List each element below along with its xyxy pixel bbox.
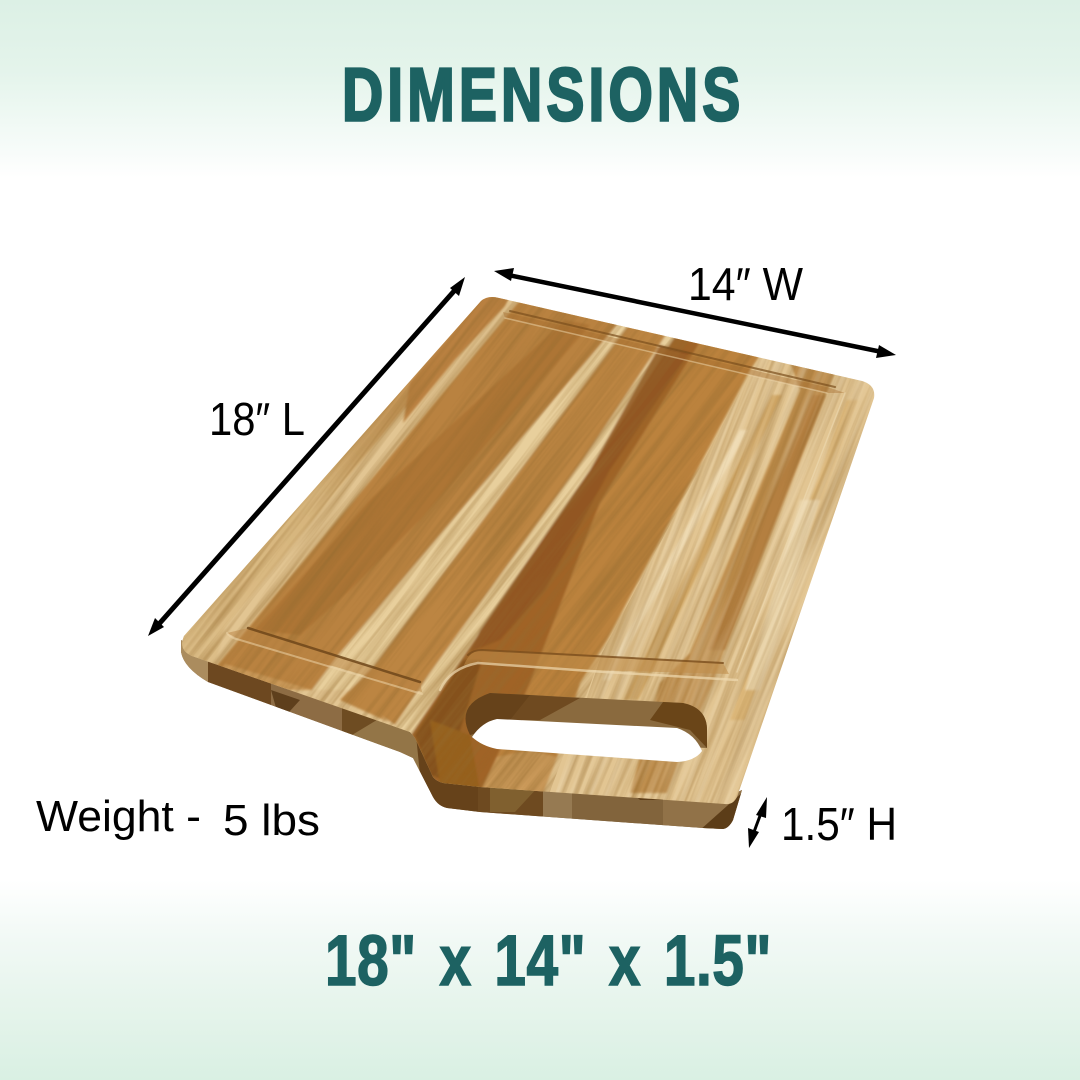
- stripe: narrow light 1: [312, 325, 628, 691]
- stripe: left medium: [197, 300, 638, 690]
- background: top mint band: [0, 0, 1080, 178]
- handle cutout: [466, 693, 707, 762]
- juice groove: [227, 311, 845, 694]
- grain overlay: right: [556, 358, 872, 804]
- groove channel: right: [737, 393, 845, 672]
- arrow: width: [494, 268, 896, 358]
- board top surface with stripes: [182, 297, 874, 804]
- stripe: below-hole tan: [480, 750, 557, 793]
- cutout inner wall: [466, 693, 707, 748]
- summary dimensions: 18" x 14" x 1.5": [325, 921, 771, 1000]
- background: bottom mint band: [0, 880, 1080, 1080]
- label: length: 18″ L: [209, 393, 305, 445]
- label: weight: [36, 792, 320, 845]
- label: weight: Weight -: [36, 792, 201, 841]
- stripe: dark: [411, 338, 700, 787]
- groove channel: top: [503, 312, 845, 393]
- stripe: narrow light 2: [382, 336, 675, 735]
- label: height: 1.5″ H: [781, 798, 897, 850]
- title: DIMENSIONS: [342, 54, 740, 137]
- stripe: medium right: [630, 362, 835, 793]
- streak: tan in light stripe: [624, 395, 782, 700]
- groove channel: handle: [464, 650, 729, 674]
- arrow: length: [148, 277, 465, 636]
- streak: right frame: [730, 400, 858, 720]
- stripe: left edge wood: [175, 290, 495, 665]
- stripe: medium: [496, 344, 760, 758]
- stripe: medium 2: [340, 327, 666, 726]
- arrow: height: [748, 797, 767, 848]
- cutout opening: [472, 719, 702, 762]
- groove channel: left: [227, 628, 422, 692]
- illustration: cutting board: [181, 297, 874, 829]
- label: width: 14″ W: [688, 258, 804, 310]
- label: weight: 5 lbs: [223, 796, 320, 845]
- grain overlay: left: [182, 297, 752, 792]
- board side faces: [175, 630, 745, 835]
- stripe: corner brown: [403, 292, 510, 423]
